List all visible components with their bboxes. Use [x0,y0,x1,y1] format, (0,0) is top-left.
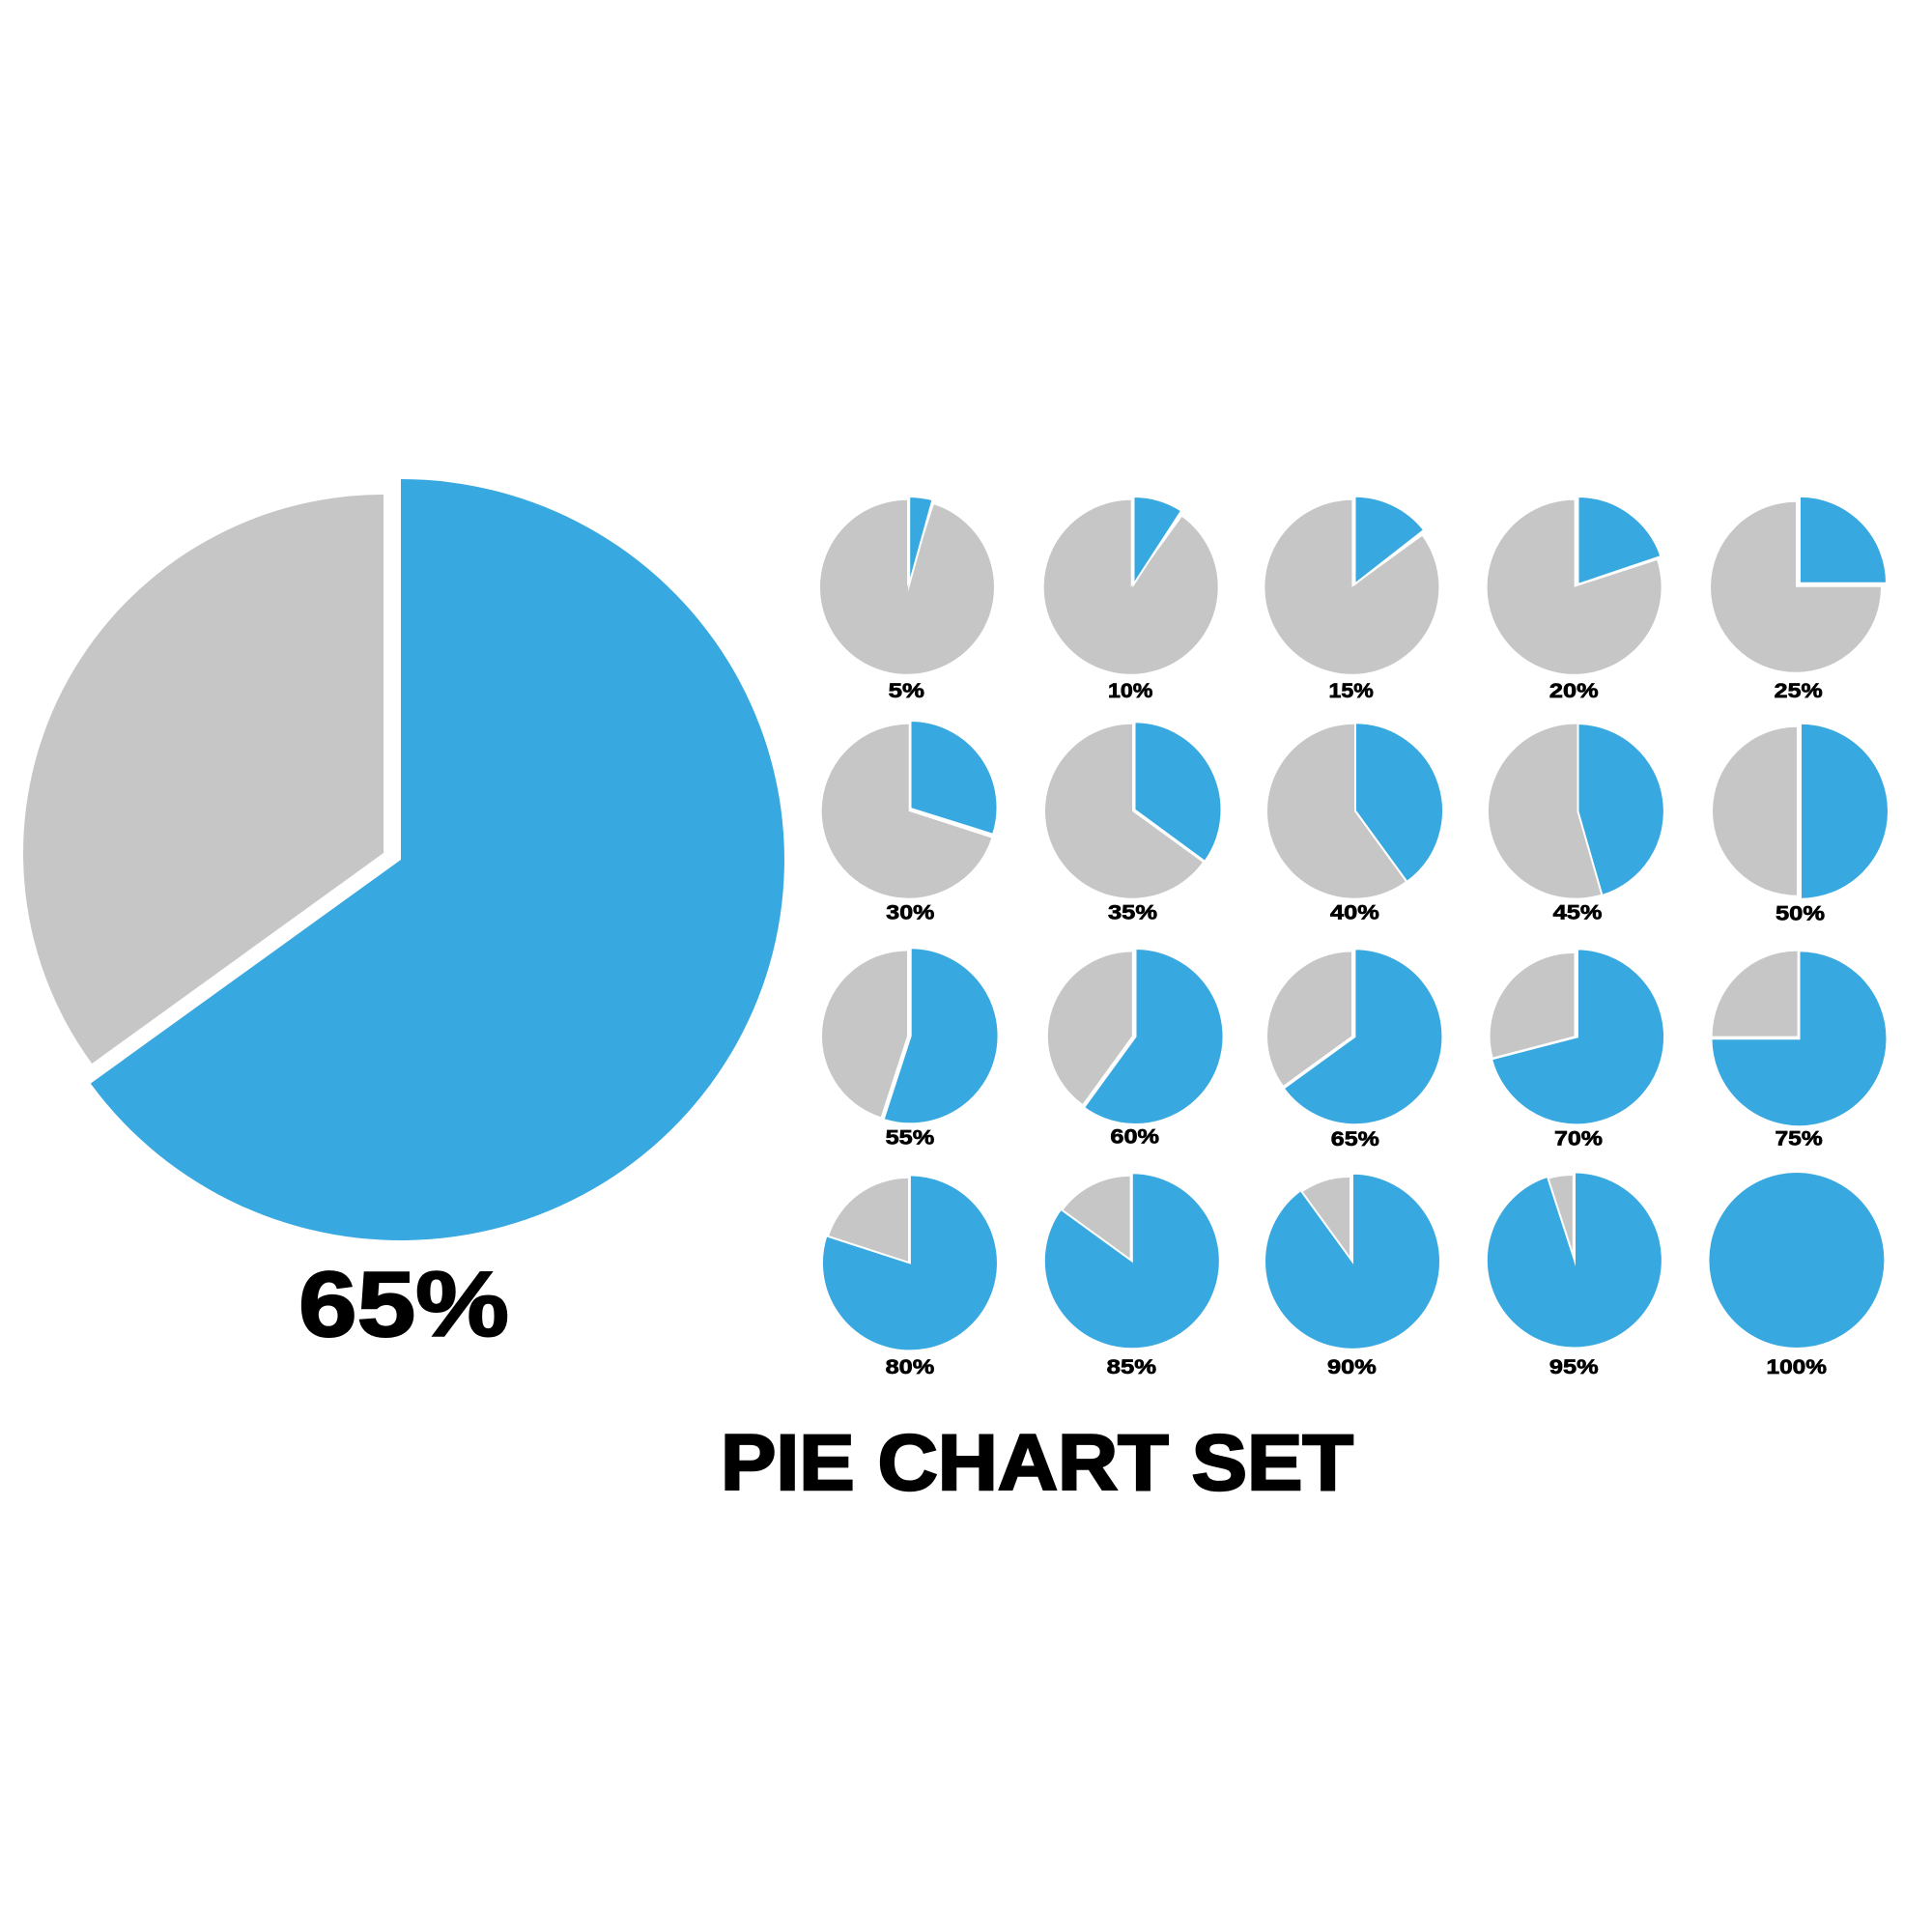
small pie: 75% [1712,951,1888,1151]
small pie: 65%: 65% [1331,1128,1379,1151]
small pie: 15%: 15% [1329,680,1374,702]
small pie: 95% [1487,1173,1662,1378]
small pie: 20% [1488,497,1662,702]
small pie: 35% [1045,722,1221,923]
small pie: 95%: 95% [1549,1356,1599,1378]
small pie: 65% [1267,949,1442,1151]
small pie: 85%: 85% [1107,1356,1156,1378]
small pie: 100% [1709,1173,1884,1378]
small pie: 90%: 90% [1327,1356,1377,1378]
small pie: 10%: 10% [1108,680,1153,702]
small pie: 70% [1491,949,1664,1151]
small pie: 40% [1267,723,1443,923]
small pie: 60%: 60% [1110,1126,1159,1149]
small pie: 50%: 50% [1776,903,1825,925]
small pie: 55%: 55% [886,1126,935,1150]
small pie: 15% [1264,497,1438,702]
small pie: 55% [822,948,999,1150]
small pie: 30%: 30% [886,901,935,923]
small pie: 45%: 45% [1553,901,1603,923]
small pie: 25%: 25% [1775,680,1823,702]
small pie: 35%: 35% [1108,901,1157,923]
small pie: 75%: 75% [1776,1128,1823,1151]
small pie: 50% [1713,724,1889,925]
small pie: 25% [1711,497,1887,702]
title: PIE CHART SET [721,1419,1353,1507]
small pie: 90% [1264,1174,1440,1378]
small pie: 60% [1048,949,1224,1149]
small pie: 30% [822,721,998,923]
large pie chart: 65% [23,479,784,1240]
small pie: 80% [822,1175,998,1378]
small pie: 80%: 80% [886,1356,935,1378]
small pie: 40%: 40% [1330,901,1379,923]
small pie: 5%: 5% [889,680,924,702]
small pie: 20%: 20% [1549,680,1599,702]
small pie: 10% [1044,497,1218,702]
small pie: 5% [820,497,994,702]
small pie: 85% [1044,1173,1220,1378]
large pie label: 65% [298,1253,509,1356]
small pie: 70%: 70% [1554,1128,1603,1151]
small pie: 100%: 100% [1766,1356,1827,1378]
small pie: 45% [1489,724,1664,923]
